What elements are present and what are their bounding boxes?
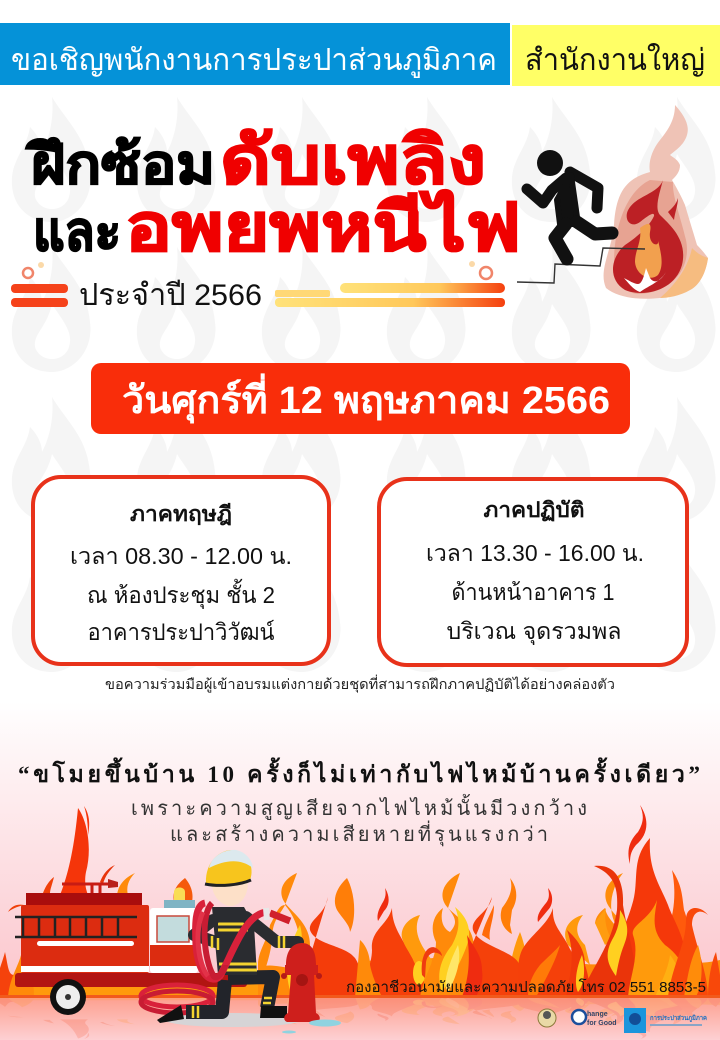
header tag: head office <box>512 25 720 86</box>
supporting text <box>131 794 587 847</box>
ground reflection <box>0 995 720 1040</box>
fire truck <box>15 879 247 1015</box>
date banner <box>91 363 630 434</box>
panel: theory session <box>33 477 329 664</box>
panel: practice session: ภาคปฏิบัติ <box>484 499 584 522</box>
panel: practice session: บริเวณ จุดรวมพล <box>446 618 622 645</box>
quote: “ขโมยขึ้นบ้าน 10 ครั้งก็ไม่เท่ากับไฟไหม้บ้านครั้งเดียว” <box>18 757 700 787</box>
panel: practice session: เวลา 13.30 - 16.00 น. <box>426 540 644 566</box>
header tag: head office: สำนักงานใหญ่ <box>525 43 705 77</box>
panel: theory session: ภาคทฤษฎี <box>130 502 232 526</box>
title: อพยพหนีไฟ <box>125 189 521 264</box>
subtitle: annual: ประจำปี 2566 <box>79 279 262 312</box>
decorative bars right <box>275 261 505 307</box>
logo: change for good <box>572 1010 617 1027</box>
title: ดับเพลิง <box>220 123 486 197</box>
lower pink background <box>0 702 720 997</box>
logo: change for good: for Good <box>587 1020 617 1027</box>
supporting text: และสร้างความเสียหายที่รุนแรงกว่า <box>170 820 548 847</box>
icon: person running from fire <box>517 105 708 299</box>
panel: theory session: ณ ห้องประชุม ชั้น 2 <box>87 579 275 609</box>
header bar: invitation <box>0 23 510 85</box>
panel: theory session: อาคารประปาวิวัฒน์ <box>88 619 275 645</box>
dress code note: ขอความร่วมมือผู้เข้าอบรมแต่งกายด้วยชุดที่สามารถฝึกภาคปฏิบัติได้อย่างคล่องตัว <box>105 675 615 693</box>
panel: practice session: ด้านหน้าอาคาร 1 <box>452 579 614 605</box>
panel: practice session <box>379 479 687 665</box>
background flame watermark <box>0 88 720 696</box>
logo: PWA <box>624 1008 707 1033</box>
logo: emblem <box>538 1009 556 1027</box>
flames illustration <box>0 805 720 997</box>
supporting text: เพราะความสูญเสียจากไฟไหม้นั้นมีวงกว้าง <box>131 794 587 821</box>
title <box>25 123 521 264</box>
logo: change for good: hange <box>587 1011 608 1018</box>
title: และ <box>33 202 121 262</box>
date banner: วันศุกร์ที่ 12 พฤษภาคม 2566 <box>122 373 610 424</box>
title: ฝึกซ้อม <box>25 135 215 195</box>
footer contact text: กองอาชีวอนามัยและความปลอดภัย โทร 02 551 8853-5 <box>346 978 706 996</box>
firefighter with hose <box>141 850 341 1034</box>
header bar: invitation: ขอเชิญพนักงานการประปาส่วนภูมิภาค <box>11 44 497 78</box>
panel: theory session: เวลา 08.30 - 12.00 น. <box>70 543 292 569</box>
logo: PWA: การประปาส่วนภูมิภาค <box>650 1014 707 1023</box>
decorative bars left <box>11 262 68 307</box>
